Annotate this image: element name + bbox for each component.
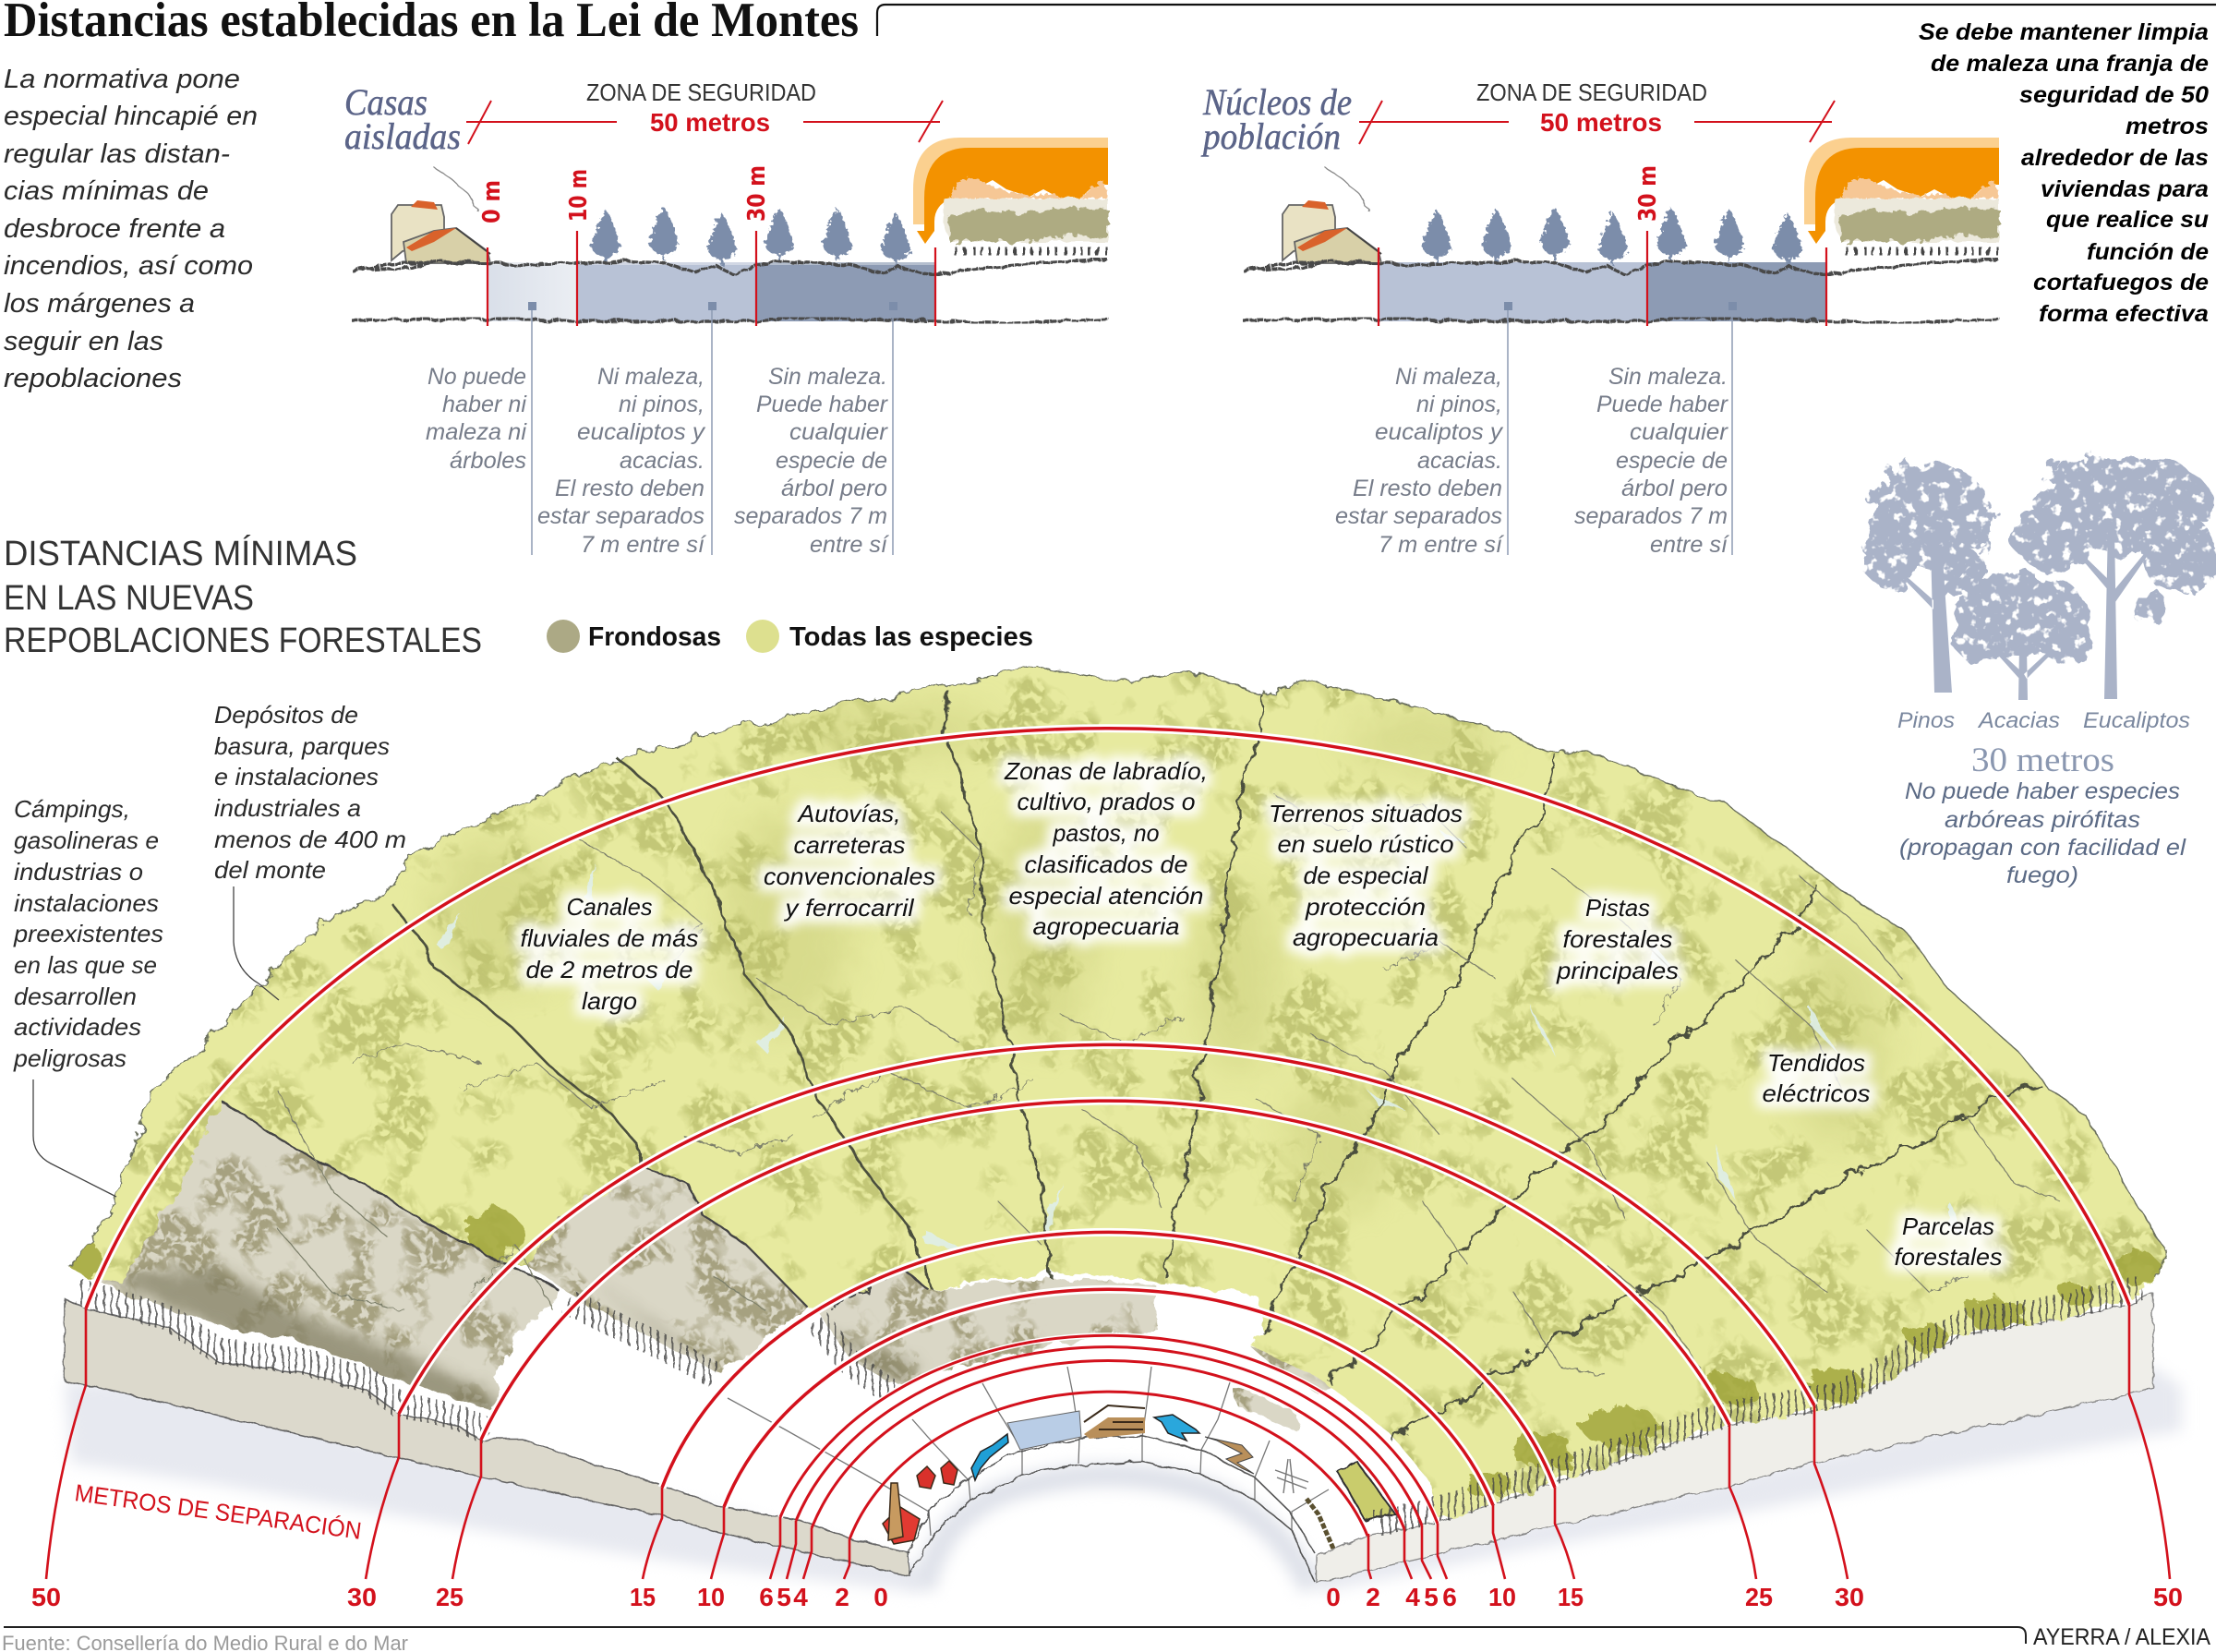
safety zone dimension — [1359, 78, 1835, 144]
trunk: eucalyptus — [2078, 526, 2153, 699]
house illustration — [1243, 166, 1381, 271]
callout: campings: gasolineras e — [14, 826, 159, 854]
fan diagram — [31, 660, 2183, 1611]
floor icons — [883, 1405, 1333, 1549]
panel: nucleos de poblacion — [1200, 78, 1999, 558]
icon: factory — [883, 1483, 920, 1544]
intro text block — [4, 65, 258, 393]
ring: 2 m — [844, 1392, 1371, 1579]
callout: depositos: e instalaciones — [214, 763, 379, 790]
frondosas patches — [102, 1103, 1331, 1431]
note: 10 to 30 m: ni pinos, — [619, 392, 705, 417]
floor cell lines — [728, 1367, 1329, 1536]
distance numbers: 10 — [1488, 1583, 1516, 1611]
intro text block: La normativa pone — [4, 65, 240, 94]
intro text block: regular las distan- — [4, 139, 230, 169]
sector label: terrenos: de especial — [1304, 862, 1429, 889]
callout: depositos — [214, 701, 406, 1000]
note: 10 to 30 m — [537, 364, 706, 558]
small green patch — [1337, 1462, 1395, 1521]
ring: 4 m — [803, 1360, 1412, 1579]
note: 30 to 50 m: separados 7 m — [734, 503, 887, 529]
sector label: zonas de labradio: clasificados de — [1025, 850, 1187, 878]
distance numbers: 30 — [1835, 1583, 1864, 1611]
note: 0 to 30 m: ni pinos, — [1416, 392, 1502, 417]
note: 0 to 10 m: árboles — [450, 448, 526, 474]
row of trees — [1422, 207, 1802, 266]
sector label: canales: Canales — [567, 893, 652, 921]
right side callout: seguridad de 50 — [2019, 82, 2209, 108]
callout: campings: desarrollen — [14, 983, 137, 1010]
30 metros note: arbóreas pirófitas — [1945, 807, 2140, 833]
inner arch edges — [909, 1436, 1315, 1582]
tree names: Eucaliptos — [2083, 708, 2190, 733]
right side callout — [1919, 19, 2209, 327]
note: 0 to 30 m: estar separados — [1335, 503, 1502, 529]
distance numbers: 0 — [873, 1583, 888, 1611]
icon: pond — [1154, 1415, 1199, 1441]
tree names: Pinos — [1897, 708, 1955, 733]
icon: canal — [1007, 1411, 1081, 1450]
note: 30 to 50 m: Sin maleza. — [1608, 364, 1728, 390]
sector label: autovias: y ferrocarril — [783, 894, 915, 922]
sector label: terrenos: protección — [1305, 893, 1426, 921]
legend: Todas las especies — [789, 622, 1033, 652]
sector label: terrenos: Terrenos situados — [1269, 800, 1463, 827]
icon: tilled field — [1084, 1405, 1145, 1439]
legend — [547, 620, 1033, 653]
trunk: pine — [1900, 545, 1969, 693]
note: 30 to 50 m: entre sí — [810, 532, 889, 558]
sector label: zonas de labradio: agropecuaria — [1032, 912, 1180, 940]
ring: 10 m — [711, 1289, 1505, 1579]
icon: power line — [1275, 1459, 1308, 1493]
callout: depositos: menos de 400 m — [214, 826, 406, 853]
fan ground shadow — [65, 1367, 2182, 1592]
30 metros note: fuego) — [2006, 862, 2078, 888]
sector label: zonas de labradio: cultivo, prados o — [1018, 788, 1195, 815]
frondosas outline — [223, 1103, 929, 1312]
trunk: acacia — [1994, 646, 2054, 700]
callout: campings: en las que se — [14, 951, 157, 979]
right side callout: cortafuegos de — [2033, 270, 2209, 295]
icon: houses — [917, 1461, 957, 1489]
heading: nucleos de poblacion — [1200, 81, 1352, 157]
distance numbers: 4 — [793, 1583, 808, 1611]
sector label: zonas de labradio — [1004, 757, 1208, 940]
safety zone dimension: 50 metros — [1540, 108, 1662, 137]
distance markers — [478, 165, 935, 326]
note: 10 to 30 m: Ni maleza, — [597, 364, 705, 390]
ring: 25 m — [452, 1101, 1756, 1579]
note: 10 to 30 m: estar separados — [537, 503, 705, 529]
heading: nucleos de poblacion: población — [1200, 115, 1341, 157]
sector label: terrenos — [1269, 800, 1463, 951]
right side callout: Se debe mantener limpia — [1919, 19, 2209, 45]
ring: 50 m — [46, 729, 2170, 1579]
tree names: Acacias — [1977, 708, 2060, 733]
distance numbers: 5 — [1424, 1583, 1439, 1611]
icon: hedge — [1307, 1499, 1333, 1549]
inner arch shadow — [923, 1476, 1311, 1588]
distance markers — [1379, 165, 1826, 326]
distance numbers: 10 — [697, 1583, 725, 1611]
sector label: pistas: Pistas — [1585, 894, 1650, 922]
sector dividing lines — [392, 689, 2041, 1440]
callout: depositos: basura, parques — [214, 732, 390, 760]
icon: pine — [1863, 464, 1993, 595]
zone bands — [1379, 262, 1826, 321]
callout: campings: preexistentes — [13, 920, 163, 947]
note: 0 to 30 m — [1335, 364, 1504, 558]
icon: acacia — [1954, 575, 2096, 664]
terrain section — [352, 259, 1108, 323]
forest floor: all species — [55, 660, 2179, 1537]
icon: river — [971, 1434, 1008, 1480]
note: 10 to 30 m: El resto deben — [555, 476, 705, 501]
sector label: pistas: forestales — [1562, 925, 1673, 953]
note: 30 to 50 m: cualquier — [789, 419, 889, 445]
fire arrow and forest — [1804, 138, 1999, 255]
sector label: parcelas — [1895, 1212, 2002, 1271]
thin sketch lines — [277, 794, 2059, 1376]
intro text block: seguir en las — [4, 327, 163, 356]
legend: Frondosas — [588, 622, 721, 652]
intro text block: los márgenes a — [4, 289, 195, 319]
30 metros note — [1899, 742, 2187, 888]
note: 30 to 50 m: separados 7 m — [1574, 503, 1728, 529]
sector label: autovias: Autovías, — [796, 800, 901, 827]
right side callout: de maleza una franja de — [1931, 51, 2209, 77]
front wall left — [65, 1298, 910, 1576]
tree trunk hatching — [78, 1288, 2142, 1524]
intro text block: repoblaciones — [4, 364, 182, 393]
right side callout: forma efectiva — [2039, 301, 2209, 327]
heading: casas aisladas — [344, 81, 461, 157]
callout: depositos: Depósitos de — [214, 701, 358, 729]
note: 10 to 30 m: acacias. — [620, 448, 705, 474]
front wall right — [1317, 1294, 2153, 1583]
header rule — [877, 5, 2216, 36]
note: 0 to 30 m: Ni maleza, — [1395, 364, 1502, 390]
section heading: DISTANCIAS MÍNIMAS — [4, 534, 357, 573]
distance numbers: 50 — [31, 1583, 61, 1611]
sector label: pistas: principales — [1556, 957, 1679, 984]
note: 30 to 50 m: especie de — [776, 448, 887, 474]
distance numbers: 0 — [1326, 1583, 1341, 1611]
sector label: zonas de labradio: pastos, no — [1053, 819, 1160, 847]
leader lines — [528, 302, 897, 555]
footer rule — [4, 1627, 2026, 1644]
note: 0 to 10 m — [426, 364, 527, 474]
distance numbers — [31, 1583, 2183, 1611]
sector label: zonas de labradio: especial atención — [1008, 882, 1204, 910]
distance numbers: 2 — [1366, 1583, 1380, 1611]
sector label: canales — [521, 893, 698, 1015]
heading: casas aisladas: aisladas — [344, 115, 461, 157]
sector label: canales: largo — [582, 987, 637, 1015]
icon: eucalyptus — [2016, 453, 2216, 630]
pale streaks — [436, 829, 1966, 1252]
metros de separacion label: METROS DE SEPARACIÓN — [73, 1478, 363, 1545]
callout: campings: industrias o — [14, 858, 143, 886]
sector label: autovias — [764, 800, 935, 922]
note: 30 to 50 m — [734, 364, 889, 558]
note: 0 to 30 m: El resto deben — [1353, 476, 1502, 501]
house illustration — [352, 166, 490, 271]
distance numbers: 6 — [1442, 1583, 1457, 1611]
sector label: terrenos: agropecuaria — [1293, 923, 1439, 951]
right side callout: metros — [2126, 114, 2209, 139]
tree names — [1897, 708, 2190, 733]
section heading: REPOBLACIONES FORESTALES — [4, 621, 482, 660]
sector label: canales: de 2 metros de — [526, 956, 692, 983]
30 metros note: 30 metros — [1971, 742, 2114, 779]
sector label: tendidos: eléctricos — [1762, 1079, 1871, 1107]
distance rings and leaders — [46, 729, 2170, 1579]
distance numbers: 30 — [347, 1583, 377, 1611]
section heading: EN LAS NUEVAS — [4, 579, 254, 618]
note: 30 to 50 m: Puede haber — [756, 392, 889, 417]
sector label: autovias: carreteras — [794, 831, 905, 859]
leader lines — [1504, 302, 1737, 555]
distance numbers: 6 — [759, 1583, 774, 1611]
30 metros note: (propagan con facilidad el — [1899, 835, 2187, 861]
callout: campings: Cámpings, — [14, 795, 130, 823]
intro text block: especial hincapié en — [4, 102, 258, 131]
sector label: parcelas: forestales — [1895, 1243, 2002, 1271]
fire arrow and forest — [913, 138, 1108, 255]
intro text block: cias mínimas de — [4, 176, 209, 206]
note: 0 to 10 m: haber ni — [442, 392, 527, 417]
distance numbers: 5 — [777, 1583, 791, 1611]
intro text block: desbroce frente a — [4, 214, 225, 244]
distance numbers: 2 — [835, 1583, 849, 1611]
sector label: pistas — [1556, 894, 1679, 984]
note: 0 to 30 m: eucaliptos y — [1375, 419, 1504, 445]
note: 30 to 50 m: especie de — [1616, 448, 1728, 474]
callout: campings: actividades — [14, 1013, 141, 1041]
row of trees — [591, 207, 910, 266]
distance markers: 0 m — [478, 180, 506, 223]
right side callout: que realice su — [2046, 207, 2209, 233]
sector label: autovias: convencionales — [764, 862, 935, 890]
distance markers: 30 m — [743, 165, 771, 222]
heading: nucleos de poblacion: Núcleos de — [1202, 81, 1352, 123]
right side callout: viviendas para — [2041, 176, 2209, 202]
heading: casas aisladas: Casas — [344, 81, 428, 123]
zone bands — [488, 261, 935, 321]
ring: 30 m — [366, 1044, 1848, 1579]
icon: road — [1205, 1437, 1254, 1474]
right side callout: función de — [2087, 239, 2209, 265]
note: 0 to 10 m: maleza ni — [426, 419, 527, 445]
callout: depositos: industriales a — [214, 794, 361, 822]
distance numbers: 4 — [1405, 1583, 1420, 1611]
note: 30 to 50 m — [1574, 364, 1729, 558]
note: 30 to 50 m: entre sí — [1650, 532, 1729, 558]
panel: casas aisladas — [344, 78, 1108, 558]
30 metros note: No puede haber especies — [1905, 778, 2180, 804]
safety zone dimension: 50 metros — [650, 108, 770, 137]
safety zone dimension: ZONA DE SEGURIDAD — [1476, 78, 1707, 106]
ring: 6 m — [770, 1335, 1447, 1579]
intro text block: incendios, así como — [4, 251, 253, 281]
safety zone dimension — [466, 78, 943, 144]
note: 10 to 30 m: 7 m entre sí — [581, 532, 706, 558]
fan outline — [67, 666, 2164, 1276]
safety zone dimension: ZONA DE SEGURIDAD — [586, 78, 816, 106]
terrain section — [1243, 259, 1999, 323]
callout: campings: peligrosas — [13, 1044, 126, 1072]
section heading — [4, 534, 482, 660]
callout: campings: instalaciones — [14, 889, 159, 917]
note: 0 to 30 m: acacias. — [1417, 448, 1502, 474]
callout: campings — [13, 795, 163, 1197]
ring: 15 m — [643, 1232, 1574, 1579]
distance numbers: 15 — [1558, 1583, 1584, 1611]
note: 0 to 10 m: No puede — [428, 364, 526, 390]
note: 0 to 30 m: 7 m entre sí — [1379, 532, 1504, 558]
note: 30 to 50 m: árbol pero — [781, 476, 887, 501]
distance numbers: 15 — [630, 1583, 656, 1611]
note: 30 to 50 m: árbol pero — [1621, 476, 1728, 501]
note: 10 to 30 m: eucaliptos y — [577, 419, 706, 445]
distance numbers: 50 — [2153, 1583, 2183, 1611]
distance numbers: 25 — [1745, 1583, 1773, 1611]
note: 30 to 50 m: cualquier — [1630, 419, 1729, 445]
note: 30 to 50 m: Sin maleza. — [768, 364, 887, 390]
sector label: tendidos: Tendidos — [1767, 1049, 1865, 1077]
distance markers: 10 m — [565, 169, 593, 222]
distance numbers: 25 — [436, 1583, 464, 1611]
pyrophytic trees illustration — [1863, 453, 2216, 700]
callout: depositos: del monte — [214, 856, 326, 884]
right side callout: alrededor de las — [2021, 145, 2209, 171]
sector label: parcelas: Parcelas — [1902, 1212, 1994, 1240]
note: 30 to 50 m: Puede haber — [1596, 392, 1729, 417]
sector label: canales: fluviales de más — [521, 924, 698, 952]
distance markers: 30 m — [1634, 165, 1662, 222]
sector label: zonas de labradio: Zonas de labradío, — [1004, 757, 1208, 785]
sector label: terrenos: en suelo rústico — [1278, 830, 1453, 858]
ring: 5 m — [787, 1347, 1431, 1579]
sector label: tendidos — [1762, 1049, 1871, 1107]
